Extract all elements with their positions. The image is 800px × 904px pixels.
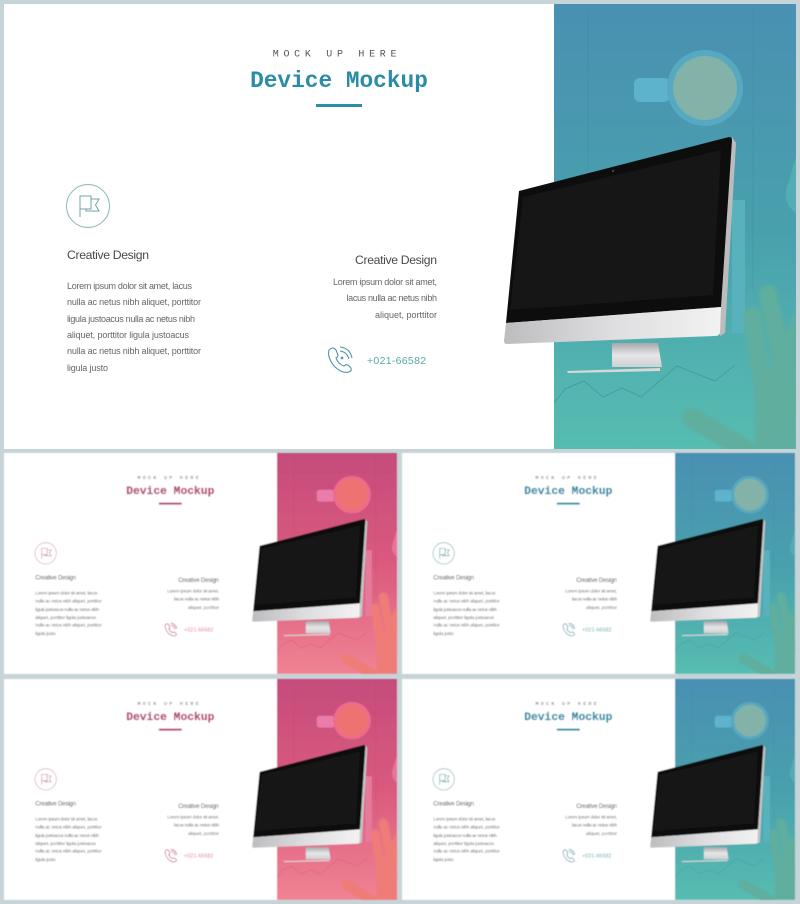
right text block: Creative Design — [178, 804, 219, 810]
left text block: Lorem ipsum dolor sit amet, lacus — [35, 590, 98, 595]
left text block: Creative Design — [433, 802, 474, 808]
left text block: nulla ac netus nibh aliquet, porttitor — [35, 623, 102, 628]
title: Device Mockup — [126, 486, 215, 498]
title eyebrow: MOCK UP HERE — [137, 475, 201, 481]
photo panel — [675, 453, 795, 674]
left text block: ligula justo — [433, 857, 454, 862]
right text block — [565, 578, 617, 610]
left text block: nulla ac netus nibh aliquet, porttitor — [67, 346, 201, 356]
title eyebrow: MOCK UP HERE — [273, 50, 401, 60]
chart line — [278, 858, 357, 876]
title underline — [557, 503, 580, 505]
icon: flag — [35, 769, 56, 790]
right text block: lacus nulla ac netus nibh — [346, 293, 437, 303]
left text block: nulla ac netus nibh aliquet, porttitor — [433, 598, 500, 603]
title underline — [557, 729, 580, 731]
left text block: ligula justoacus nulla ac netus nibh — [433, 833, 497, 838]
slide: small teal top — [402, 453, 795, 674]
title eyebrow: MOCK UP HERE — [137, 701, 201, 707]
right text block: Lorem ipsum dolor sit amet, — [565, 814, 617, 819]
left text block: nulla ac netus nibh aliquet, porttitor — [35, 849, 102, 854]
left text block: nulla ac netus nibh aliquet, porttitor — [35, 598, 102, 603]
icon: mug — [317, 476, 371, 514]
monitor — [252, 519, 367, 636]
hand — [692, 294, 796, 449]
left text block: Creative Design — [35, 802, 76, 808]
monitor — [504, 137, 736, 373]
icon: flag — [66, 184, 110, 228]
title: Device Mockup — [250, 68, 428, 94]
icon: phone — [165, 623, 177, 636]
icon: phone — [563, 623, 575, 636]
left text block: aliquet, porttitor ligula justoacus — [433, 841, 495, 846]
left text block: ligula justoacus nulla ac netus nibh — [67, 314, 195, 324]
phone number: +021-66582 — [582, 854, 612, 860]
title: Device Mockup — [524, 486, 613, 498]
slide: small pink bottom — [4, 679, 397, 900]
icon: mug — [317, 702, 371, 740]
icon: phone — [329, 347, 352, 372]
chart line — [554, 365, 735, 403]
title underline — [159, 503, 182, 505]
left text block: ligula justo — [35, 857, 56, 862]
hand — [346, 823, 397, 900]
monitor — [650, 519, 765, 636]
left text block — [35, 576, 102, 636]
left text block: ligula justoacus nulla ac netus nibh — [35, 607, 99, 612]
left text block: aliquet, porttitor ligula justoacus — [35, 615, 97, 620]
right text block: Creative Design — [576, 578, 617, 584]
slide: small teal bottom — [402, 679, 795, 900]
chart line — [677, 635, 752, 648]
right text block — [565, 804, 617, 836]
right text block: Lorem ipsum dolor sit amet, — [167, 814, 219, 819]
left text block: Lorem ipsum dolor sit amet, lacus — [67, 281, 192, 291]
right text block: Creative Design — [576, 804, 617, 810]
right text block — [333, 253, 437, 320]
left text block — [35, 802, 102, 862]
right text block: Creative Design — [355, 253, 437, 267]
title underline — [159, 729, 182, 731]
icon: mug — [715, 702, 769, 740]
right text block: aliquet, porttitor — [586, 605, 617, 610]
icon: flag — [35, 543, 56, 564]
photo panel — [277, 679, 397, 900]
left text block: ligula justo — [35, 631, 56, 636]
left text block: nulla ac netus nibh aliquet, porttitor — [67, 297, 201, 307]
left text block: aliquet, porttitor ligula justoacus — [35, 841, 97, 846]
title underline — [316, 104, 362, 107]
right text block — [167, 804, 219, 836]
right text block: aliquet, porttitor — [188, 605, 219, 610]
chart line — [278, 632, 357, 650]
right text block: lacus nulla ac netus nibh — [572, 596, 617, 601]
title eyebrow: MOCK UP HERE — [535, 475, 599, 481]
left text block — [433, 802, 500, 862]
right text block: aliquet, porttitor — [586, 831, 617, 836]
slide: large teal — [4, 4, 796, 449]
right text block: Lorem ipsum dolor sit amet, — [333, 277, 437, 287]
left text block: ligula justo — [67, 363, 108, 373]
monitor — [252, 745, 367, 862]
right text block — [167, 578, 219, 610]
right text block: lacus nulla ac netus nibh — [174, 596, 219, 601]
right text block: aliquet, porttitor — [375, 310, 437, 320]
left text block: Creative Design — [433, 576, 474, 582]
icon: phone — [165, 849, 177, 862]
photo panel — [675, 679, 795, 900]
right text block: lacus nulla ac netus nibh — [572, 822, 617, 827]
hand — [744, 597, 795, 674]
left text block: ligula justo — [433, 631, 454, 636]
title: Device Mockup — [524, 712, 613, 724]
left text block: nulla ac netus nibh aliquet, porttitor — [433, 849, 500, 854]
monitor — [650, 745, 765, 862]
phone number: +021-66582 — [367, 355, 426, 367]
right text block: Creative Design — [178, 578, 219, 584]
left text block: Lorem ipsum dolor sit amet, lacus — [433, 816, 496, 821]
phone number: +021-66582 — [184, 628, 214, 634]
icon: mug — [634, 50, 743, 126]
hand — [744, 823, 795, 900]
left text block: Creative Design — [67, 248, 149, 262]
left text block: nulla ac netus nibh aliquet, porttitor — [433, 824, 500, 829]
title eyebrow: MOCK UP HERE — [535, 701, 599, 707]
right text block: lacus nulla ac netus nibh — [174, 822, 219, 827]
chart line — [678, 862, 754, 874]
icon: phone — [563, 849, 575, 862]
title: Device Mockup — [126, 712, 215, 724]
left text block: ligula justoacus nulla ac netus nibh — [433, 607, 497, 612]
icon: flag — [433, 543, 454, 564]
photo panel — [277, 453, 397, 674]
left text block — [67, 248, 201, 373]
right text block: aliquet, porttitor — [188, 831, 219, 836]
left text block: nulla ac netus nibh aliquet, porttitor — [433, 623, 500, 628]
left text block: Lorem ipsum dolor sit amet, lacus — [433, 590, 496, 595]
phone number: +021-66582 — [582, 628, 612, 634]
hand — [346, 597, 397, 674]
slide: small pink top — [4, 453, 397, 674]
left text block: aliquet, porttitor ligula justoacus — [433, 615, 495, 620]
left text block — [433, 576, 500, 636]
right text block: Lorem ipsum dolor sit amet, — [167, 588, 219, 593]
right text block: Lorem ipsum dolor sit amet, — [565, 588, 617, 593]
photo panel — [554, 4, 796, 449]
left text block: Creative Design — [35, 576, 76, 582]
left text block: Lorem ipsum dolor sit amet, lacus — [35, 816, 98, 821]
phone number: +021-66582 — [184, 854, 214, 860]
left text block: aliquet, porttitor ligula justoacus — [67, 330, 190, 340]
left text block: ligula justoacus nulla ac netus nibh — [35, 833, 99, 838]
icon: mug — [715, 476, 769, 514]
icon: flag — [433, 769, 454, 790]
left text block: nulla ac netus nibh aliquet, porttitor — [35, 824, 102, 829]
